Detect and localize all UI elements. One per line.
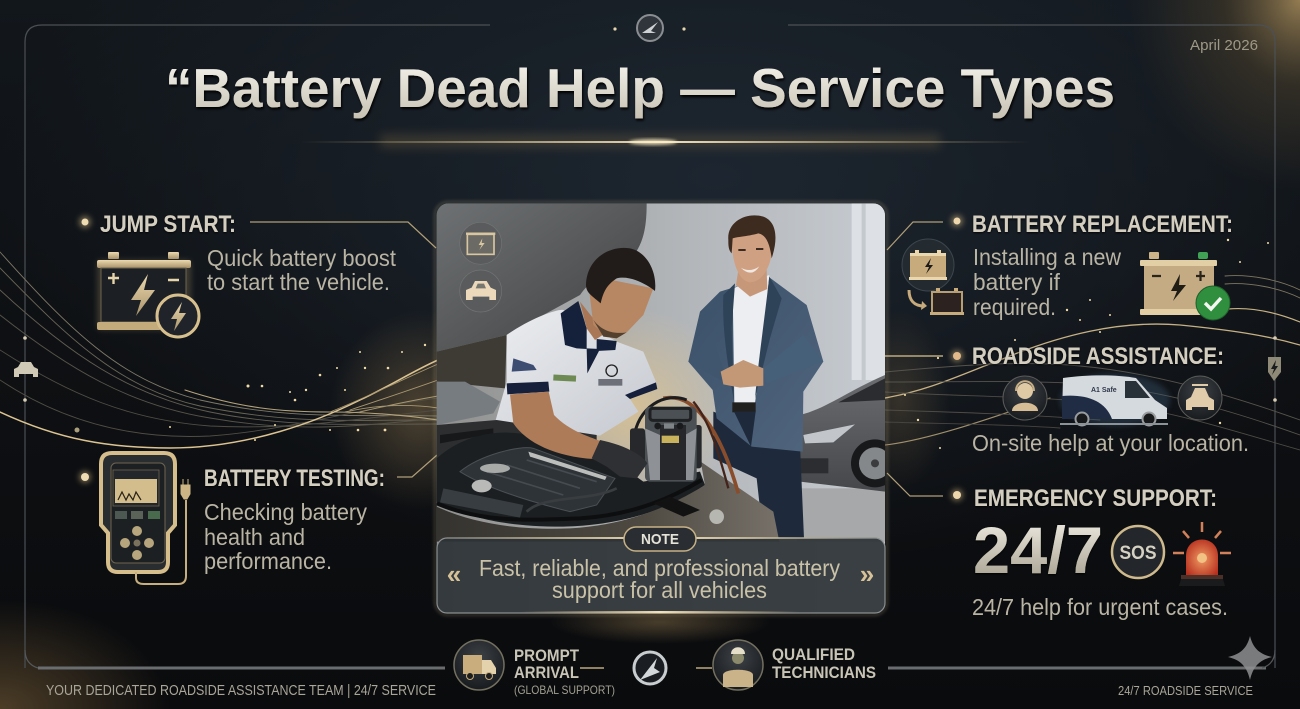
panel: battery testing	[79, 453, 385, 584]
note text: support for all vehicles	[552, 577, 767, 603]
description: performance.	[204, 548, 332, 574]
label: PROMPT	[514, 646, 580, 665]
description: Checking battery	[204, 499, 367, 525]
icon: alarm light	[1173, 522, 1231, 586]
icon: new battery with check	[1140, 252, 1230, 320]
left car	[437, 382, 500, 425]
date: April 2026	[1190, 37, 1258, 54]
note pill: NOTE	[641, 531, 679, 548]
bullet	[79, 471, 91, 483]
panel: battery replacement	[902, 211, 1233, 320]
title underline	[300, 134, 1030, 148]
car hood front	[437, 462, 779, 542]
icon: SOS	[1112, 526, 1164, 578]
chevrons: «	[447, 559, 461, 589]
description: On-site help at your location.	[972, 430, 1249, 456]
bottom emblem	[580, 652, 712, 684]
description: Quick battery boost	[207, 245, 397, 271]
icon: battery with bolt	[97, 252, 199, 337]
icon: charging bolt	[1268, 357, 1281, 381]
connector lines	[250, 222, 943, 496]
icon: SOS: SOS	[1120, 543, 1156, 564]
panel: emergency support	[951, 485, 1231, 620]
bullet	[951, 350, 963, 362]
label	[772, 645, 876, 682]
top emblem	[613, 15, 686, 41]
jump starter and cables	[630, 398, 738, 493]
icon: car	[14, 362, 38, 377]
mechanic arm and glove	[510, 392, 647, 478]
heading: ROADSIDE ASSISTANCE:	[972, 343, 1224, 370]
heading: BATTERY REPLACEMENT:	[972, 211, 1233, 238]
icon: battery tester	[101, 453, 190, 584]
24/7 figure: 24/7	[973, 513, 1103, 587]
heading: EMERGENCY SUPPORT:	[974, 485, 1217, 512]
label: (GLOBAL SUPPORT)	[514, 683, 615, 697]
right side rail icons	[1268, 336, 1281, 402]
description: health and	[204, 524, 305, 550]
title: “Battery Dead Help — Service Types	[165, 57, 1115, 119]
description: to start the vehicle.	[207, 269, 390, 295]
bullet	[951, 215, 963, 227]
footer right: 24/7 ROADSIDE SERVICE	[1118, 683, 1253, 698]
description: required.	[973, 294, 1056, 320]
label: ARRIVAL	[514, 663, 579, 682]
photo badge: battery	[460, 222, 502, 264]
label	[514, 646, 615, 697]
description: 24/7 help for urgent cases.	[972, 594, 1228, 620]
flowing gold lines: left	[0, 252, 438, 448]
engine bay	[437, 420, 705, 527]
heading: BATTERY TESTING:	[204, 465, 385, 492]
icon: technician	[713, 640, 763, 690]
icon: car	[1178, 376, 1222, 420]
footer left: YOUR DEDICATED ROADSIDE ASSISTANCE TEAM | 24/7 SERVICE	[46, 682, 436, 699]
icon: service van: A1 Safe	[1091, 387, 1117, 394]
label: QUALIFIED	[772, 645, 855, 664]
description	[207, 245, 397, 295]
icon: delivery truck	[454, 640, 504, 690]
panel: roadside assistance	[951, 343, 1249, 456]
bullet	[951, 489, 963, 501]
note pill	[624, 527, 696, 551]
description: battery if	[973, 269, 1061, 295]
sparkles	[74, 239, 1269, 449]
heading: JUMP START:	[100, 211, 236, 238]
description	[204, 499, 367, 574]
label: TECHNICIANS	[772, 663, 876, 682]
description	[973, 244, 1121, 320]
left side rail icons	[14, 336, 38, 402]
photo badge: car	[460, 270, 502, 312]
icon: agent	[1003, 376, 1047, 420]
icon: battery swap	[902, 239, 964, 315]
bottom: qualified technicians	[713, 640, 876, 690]
note text	[479, 555, 840, 603]
note box	[437, 527, 885, 614]
chevrons right: »	[860, 559, 874, 589]
description: Installing a new	[973, 244, 1121, 270]
flowing gold lines: right	[885, 276, 1300, 450]
panel: center photo	[435, 202, 899, 615]
icon: sparkle star	[1228, 636, 1272, 680]
standing man	[688, 215, 823, 538]
bullet	[79, 216, 91, 228]
mechanic torso	[493, 248, 657, 436]
panel: jump start	[79, 211, 397, 337]
icon: service van	[1060, 374, 1170, 426]
note text: Fast, reliable, and professional battery	[479, 555, 840, 581]
background car	[800, 375, 885, 492]
bottom: prompt arrival	[454, 640, 615, 697]
